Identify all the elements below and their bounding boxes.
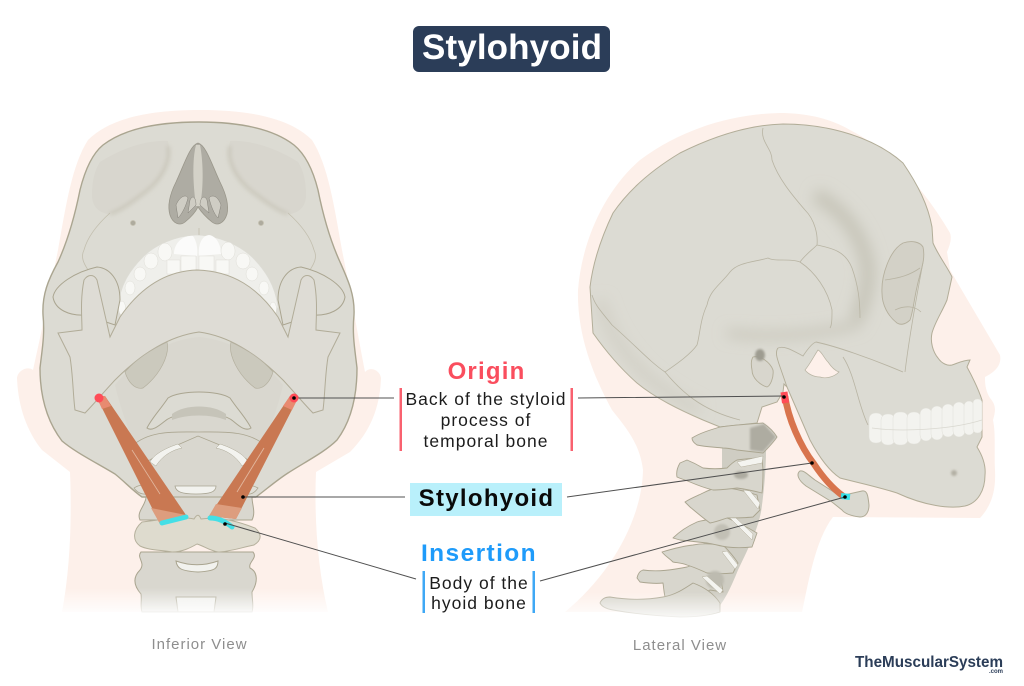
mandibular notch [805,350,839,378]
condyle edge and mastoid [751,348,787,387]
muscle: left stylohyoid [96,396,186,524]
hyoid bone lateral [798,471,869,517]
cranial base centre [115,337,283,497]
cervical vertebrae [135,497,256,612]
leader lines [225,396,845,581]
lateral skull and face [590,124,985,507]
head silhouette halo [17,110,381,612]
condyle loops [53,267,345,325]
muscle: right stylohyoid [209,396,298,527]
callout: stylohyoid: Stylohyoid [419,485,554,512]
small foramina and sutures [83,213,315,270]
logo: TheMuscularSystem [855,654,1003,671]
view label: lateral: Lateral View [633,637,727,654]
panel: lateral view skull [560,113,1000,654]
mandible [58,270,340,413]
nasal cavity [169,143,228,224]
callout: origin: temporal bone [424,431,548,451]
sutures [592,128,923,425]
callout: origin [400,358,573,451]
anchor dots [223,395,847,526]
temporal and occipital shading [654,190,878,416]
teeth lateral [869,399,982,445]
callout: origin: Back of the styloid [405,389,567,409]
callout: origin: process of [441,410,531,430]
mental foramen [951,470,957,476]
ear canal [755,349,765,361]
bottom fade [560,592,822,622]
logo: .com [989,669,1003,675]
title: Stylohyoid [422,28,602,67]
head silhouette halo [565,113,1000,612]
view label: inferior: Inferior View [151,636,248,653]
orbit shading [92,141,306,214]
intervertebral discs [702,456,763,594]
panel: inferior view skull [17,110,381,653]
vertebral column body [690,448,766,608]
callout: insertion: Body of the [429,573,529,593]
callout: insertion: Insertion [421,540,537,567]
callout: origin: Origin [448,358,525,385]
callout: insertion: hyoid bone [431,593,527,613]
origin markers [94,394,298,402]
upper teeth [118,235,278,318]
orbit [882,242,924,324]
vertebra shadows [706,424,776,589]
skull base outline [40,122,357,497]
zygomatic arch line [778,342,903,372]
callout: insertion [421,540,537,613]
bottom fade [55,588,340,616]
muscle: lateral stylohyoid [784,392,850,497]
cervical vertebrae lateral [600,423,777,617]
hyoid bone front [135,515,260,552]
